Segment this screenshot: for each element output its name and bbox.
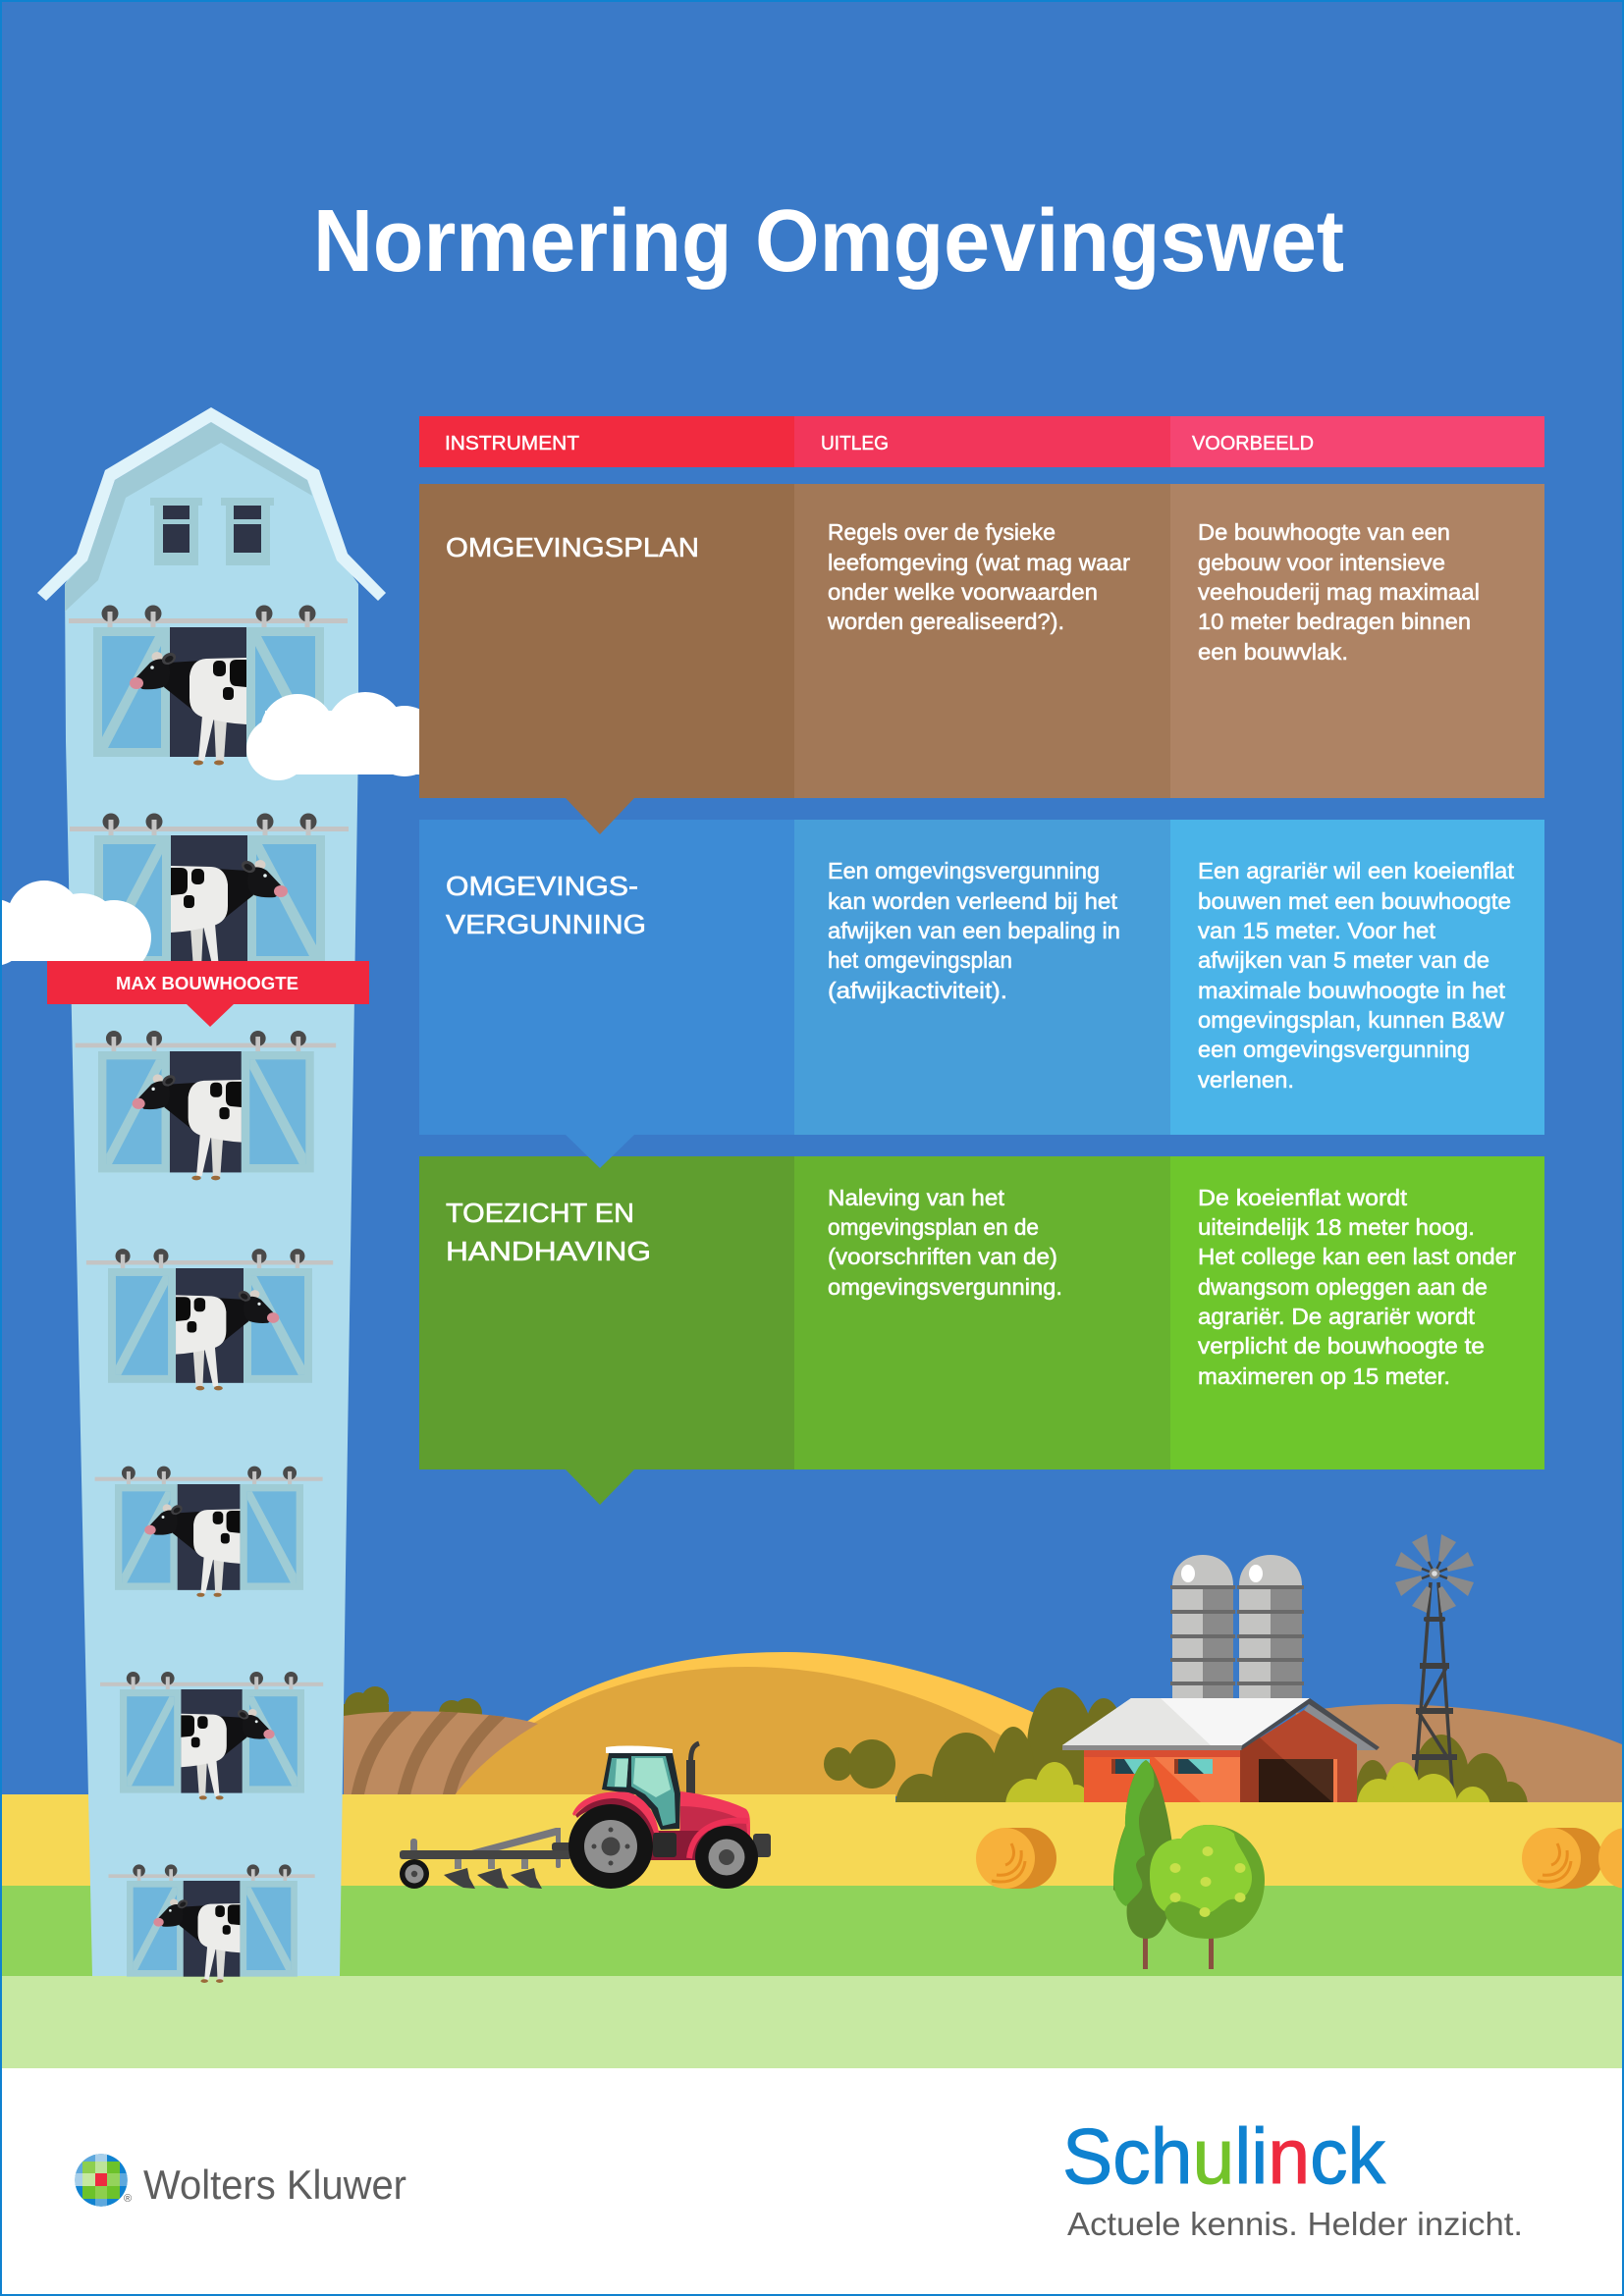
uitleg toezicht: omgevingsvergunning. [828, 1274, 1062, 1300]
row: omgevingsplan: OMGEVINGSPLAN [446, 532, 699, 562]
row: omgevingsvergunning [419, 820, 1544, 1135]
voorbeeld toezicht: agrariër. De agrariër wordt [1198, 1304, 1476, 1329]
voorbeeld toezicht: Het college kan een last onder [1198, 1244, 1516, 1269]
row: omgevingsvergunning: VERGUNNING [446, 909, 646, 939]
windmill [1395, 1534, 1474, 1802]
uitleg omgevingsvergunning: kan worden verleend bij het [828, 888, 1118, 914]
floor 6 with cow [100, 1672, 323, 1799]
voorbeeld omgevingsplan: 10 meter bedragen binnen [1198, 609, 1471, 634]
hay bale 2 [1522, 1828, 1602, 1889]
uitleg omgevingsplan [827, 519, 1130, 634]
row: toezicht en handhaving: HANDHAVING [446, 1236, 651, 1266]
tractor with plough [400, 1743, 771, 1889]
table header [419, 416, 1544, 467]
tree: round fruit tree [1150, 1825, 1265, 1969]
floor 3 with cow [76, 1031, 336, 1180]
floor 7 with cow [108, 1864, 315, 1983]
silos [1170, 1555, 1304, 1698]
voorbeeld omgevingsplan: veehouderij mag maximaal [1198, 579, 1480, 605]
tagline: Actuele kennis. Helder inzicht. [1067, 2206, 1523, 2242]
attic window left [150, 498, 202, 565]
attic window right [221, 498, 274, 565]
hill: brown right [1276, 1704, 1622, 1806]
yellow field [0, 1794, 1624, 1886]
floor 5 with cow [95, 1467, 323, 1597]
voorbeeld toezicht [1198, 1185, 1516, 1389]
pale green verge [0, 1976, 1624, 2068]
logo: Wolters Kluwer: ® [124, 2193, 132, 2205]
arrow: omgevingsplan to vergunning [566, 798, 634, 834]
table header: VOORBEELD [1192, 433, 1314, 454]
logo: Wolters Kluwer: Wolters Kluwer [143, 2162, 406, 2208]
hay bale 3 [1598, 1828, 1624, 1889]
cloud right [246, 692, 440, 780]
arrow: vergunning to toezicht [566, 1135, 634, 1168]
row: omgevingsplan [419, 484, 1544, 798]
windmill blades [1395, 1534, 1474, 1613]
uitleg toezicht: omgevingsplan en de [828, 1214, 1039, 1240]
hill: inner ochre [452, 1667, 1080, 1796]
voorbeeld toezicht: verplicht de bouwhoogte te [1198, 1333, 1485, 1359]
green field [0, 1886, 1624, 1976]
icon: globe [75, 2154, 129, 2208]
table header: UITLEG [821, 433, 889, 454]
voorbeeld omgevingsplan: een bouwvlak. [1198, 639, 1348, 665]
floor 1 with cow [69, 605, 348, 766]
hay bale 1 [976, 1828, 1056, 1889]
voorbeeld omgevingsvergunning: van 15 meter. Voor het [1198, 918, 1436, 943]
row: toezicht en handhaving: TOEZICHT EN [446, 1198, 634, 1228]
voorbeeld omgevingsvergunning: Een agrariër wil een koeienflat [1198, 858, 1515, 883]
voorbeeld omgevingsvergunning: een omgevingsvergunning [1198, 1037, 1470, 1062]
voorbeeld toezicht: uiteindelijk 18 meter hoog. [1198, 1214, 1475, 1240]
voorbeeld omgevingsplan: gebouw voor intensieve [1198, 550, 1445, 575]
title: Normering Omgevingswet [313, 192, 1344, 291]
tower wall [65, 422, 358, 1976]
floor 4 with cow [86, 1249, 333, 1390]
roof trim [37, 407, 386, 601]
landscape scene [0, 1534, 1624, 2068]
uitleg omgevingsvergunning [828, 858, 1120, 1003]
uitleg toezicht: (voorschriften van de) [828, 1244, 1057, 1269]
logo: Schulinck: Schulinck [1062, 2112, 1386, 2200]
uitleg omgevingsvergunning: het omgevingsplan [828, 947, 1012, 973]
voorbeeld toezicht: De koeienflat wordt [1198, 1185, 1408, 1210]
arrow: toezicht down [566, 1469, 634, 1505]
uitleg omgevingsplan: worden gerealiseerd?). [827, 609, 1064, 634]
roof shading [65, 422, 312, 612]
uitleg omgevingsvergunning: afwijken van een bepaling in [828, 918, 1120, 943]
uitleg omgevingsplan: onder welke voorwaarden [828, 579, 1098, 605]
uitleg omgevingsplan: Regels over de fysieke [828, 519, 1056, 545]
row: omgevingsvergunning: OMGEVINGS- [446, 871, 638, 901]
row: toezicht en handhaving [419, 1156, 1544, 1469]
uitleg omgevingsvergunning: (afwijkactiviteit). [828, 978, 1007, 1003]
footer band [0, 2068, 1624, 2296]
farm tower building [37, 407, 386, 1983]
voorbeeld omgevingsvergunning: maximale bouwhoogte in het [1198, 978, 1506, 1003]
barn window left [1111, 1759, 1150, 1774]
uitleg omgevingsvergunning: Een omgevingsvergunning [828, 858, 1100, 883]
max bouwhoogte banner [47, 961, 369, 1027]
floor 2 with cow [70, 813, 349, 974]
max bouwhoogte banner: MAX BOUWHOOGTE [116, 974, 298, 993]
uitleg omgevingsplan: leefomgeving (wat mag waar [828, 550, 1130, 575]
voorbeeld omgevingsvergunning [1198, 858, 1515, 1093]
voorbeeld omgevingsvergunning: verlenen. [1198, 1067, 1294, 1093]
cloud left [0, 881, 151, 975]
voorbeeld omgevingsplan: De bouwhoogte van een [1198, 519, 1450, 545]
logo: Wolters Kluwer [75, 2154, 406, 2208]
voorbeeld omgevingsplan [1198, 519, 1480, 665]
ploughed field [344, 1686, 538, 1801]
table header: INSTRUMENT [445, 433, 579, 454]
bushes behind barn [824, 1687, 1528, 1839]
voorbeeld omgevingsvergunning: bouwen met een bouwhoogte [1198, 888, 1511, 914]
hill: big yellow [452, 1652, 1090, 1796]
farm building [1062, 1698, 1380, 1802]
light bushes [1005, 1762, 1490, 1834]
voorbeeld toezicht: maximeren op 15 meter. [1198, 1363, 1450, 1389]
voorbeeld omgevingsvergunning: afwijken van 5 meter van de [1198, 947, 1489, 973]
uitleg toezicht: Naleving van het [828, 1185, 1005, 1210]
voorbeeld omgevingsvergunning: omgevingsplan, kunnen B&W [1198, 1007, 1504, 1033]
tree: cypress [1113, 1760, 1174, 1969]
barn window right [1174, 1759, 1213, 1774]
uitleg toezicht [828, 1185, 1062, 1300]
voorbeeld toezicht: dwangsom opleggen aan de [1198, 1274, 1488, 1300]
